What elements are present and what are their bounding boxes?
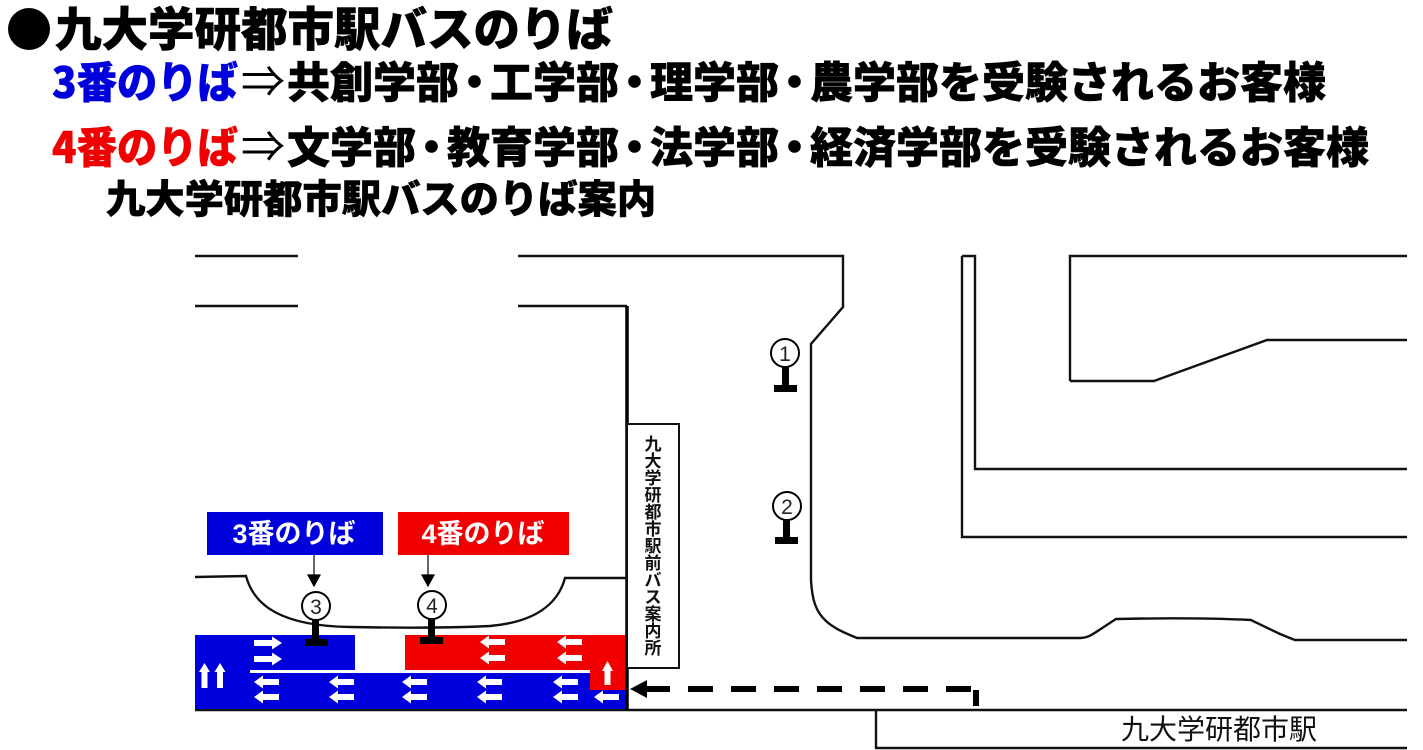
label: stop 3: 3番のりば: [232, 519, 356, 549]
map: road outlines: [195, 256, 1407, 748]
text block: stop 4 faculties: 文学部・教育学部・法学部・経済学部を受験されるお客様: [287, 114, 1369, 176]
icon: bus stop 4: 4: [426, 595, 438, 618]
panel: bus information office: 九大学研都市駅前バス案内所: [644, 435, 662, 658]
text block: stop 4 faculties: ⇒: [241, 111, 285, 175]
label: stop 3: [207, 512, 383, 555]
icon: bus stop 2: [773, 492, 801, 544]
text block: stop 4 faculties: 4番のりば: [52, 114, 238, 176]
icon: bus stop 3: 3: [310, 596, 322, 619]
icon: red lane arrows: [480, 636, 613, 685]
arrow: dashed walking route: [630, 680, 979, 706]
panel: bus information office: [627, 424, 679, 668]
icon: bus stop 2: 2: [781, 496, 793, 519]
icon: bus stop 4: [418, 591, 446, 644]
icon: blue lane arrows: [199, 636, 619, 704]
text block: stop 3 faculties: ⇒: [241, 46, 285, 110]
map: blue bus lane: [195, 635, 626, 709]
label: station name: 九大学研都市駅: [1121, 714, 1317, 745]
arrow: label 4 to stop 4: [422, 555, 434, 586]
text block: stop 3 faculties: 共創学部・工学部・理学部・農学部を受験されるお客様: [287, 49, 1326, 111]
label: stop 4: [398, 512, 569, 555]
text block: stop 3 faculties: 3番のりば: [52, 49, 238, 111]
label: stop 4: 4番のりば: [421, 519, 545, 549]
icon: bus stop 1: [771, 339, 799, 392]
map: building wall: [625, 306, 629, 710]
map: red bus lane: [405, 635, 626, 690]
arrow: label 3 to stop 3: [308, 555, 320, 586]
icon: bus stop 1: 1: [779, 343, 791, 366]
icon: bus stop 3: [302, 592, 330, 646]
heading: map title: 九大学研都市駅バスのりば案内: [106, 168, 656, 225]
